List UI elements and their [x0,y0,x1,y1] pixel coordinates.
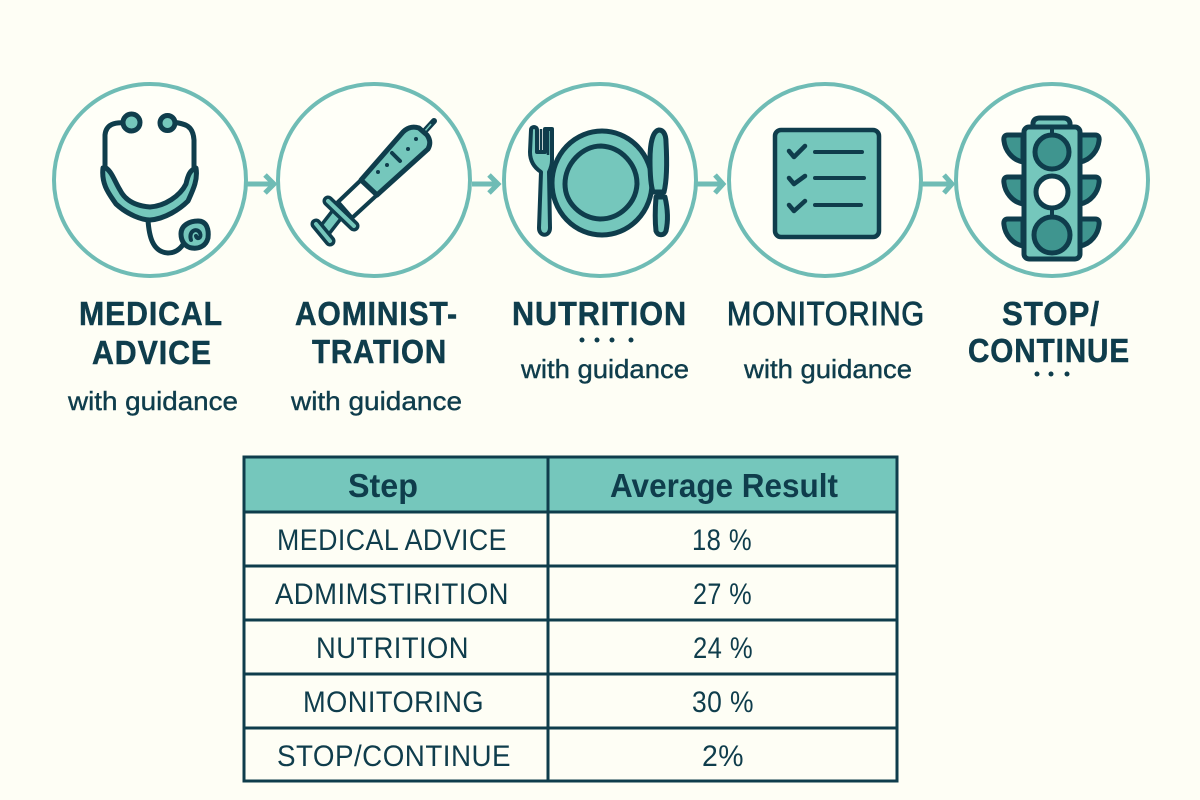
icon: stethoscope [103,114,208,253]
arrow 4 to 5 [922,175,952,193]
label: nutrition [512,295,689,384]
label: administration [290,295,462,416]
row: stop or continue: 2% [702,740,744,773]
table header [348,467,838,504]
icon: traffic light [1004,118,1099,259]
label: medical advice [67,295,238,416]
icon: checklist [775,130,879,237]
label: nutrition: NUTRITION [512,295,687,332]
row: administration: ADMIMSTIRITION [275,578,509,611]
row: nutrition: 24 % [693,632,753,665]
step 2: administration icon [278,84,470,276]
label: administration: with guidance [290,386,462,416]
row: monitoring: 30 % [692,686,754,719]
label: administration: TRATION [312,333,447,370]
label: medical advice: MEDICAL [79,295,223,332]
table header: Step [348,467,418,504]
row: administration: 27 % [693,578,752,611]
step 4: monitoring icon [729,84,921,276]
results table [244,457,897,781]
label: stop or continue: STOP/ [1002,295,1100,332]
label: medical advice: with guidance [67,386,238,416]
label: monitoring [727,295,925,384]
row: monitoring: MONITORING [303,686,484,719]
label: administration: AOMINIST- [295,295,458,332]
label: stop or continue [968,295,1130,376]
step 3: nutrition icon [504,84,696,276]
step 5: stop or continue icon [956,84,1148,276]
label: medical advice: ADVICE [92,334,212,371]
row: nutrition: NUTRITION [316,632,469,665]
step 1: medical advice icon [54,84,246,276]
arrow 3 to 4 [697,175,723,193]
row: medical advice [277,524,752,557]
row: medical advice: MEDICAL ADVICE [277,524,507,557]
table header: Average Result [610,467,838,504]
label: stop or continue: CONTINUE [968,332,1130,369]
label: monitoring: with guidance [743,354,912,384]
icon: plate and cutlery [530,127,667,235]
arrow 2 to 3 [472,175,498,193]
row: stop or continue [277,740,744,773]
label: monitoring: MONITORING [727,295,925,332]
row: stop or continue: STOP/CONTINUE [277,740,511,773]
row: administration [275,578,752,611]
row: medical advice: 18 % [692,524,752,557]
arrow 1 to 2 [247,175,274,193]
icon: syringe [316,121,434,241]
label: nutrition: with guidance [520,354,689,384]
row: nutrition [316,632,753,665]
row: monitoring [303,686,754,719]
